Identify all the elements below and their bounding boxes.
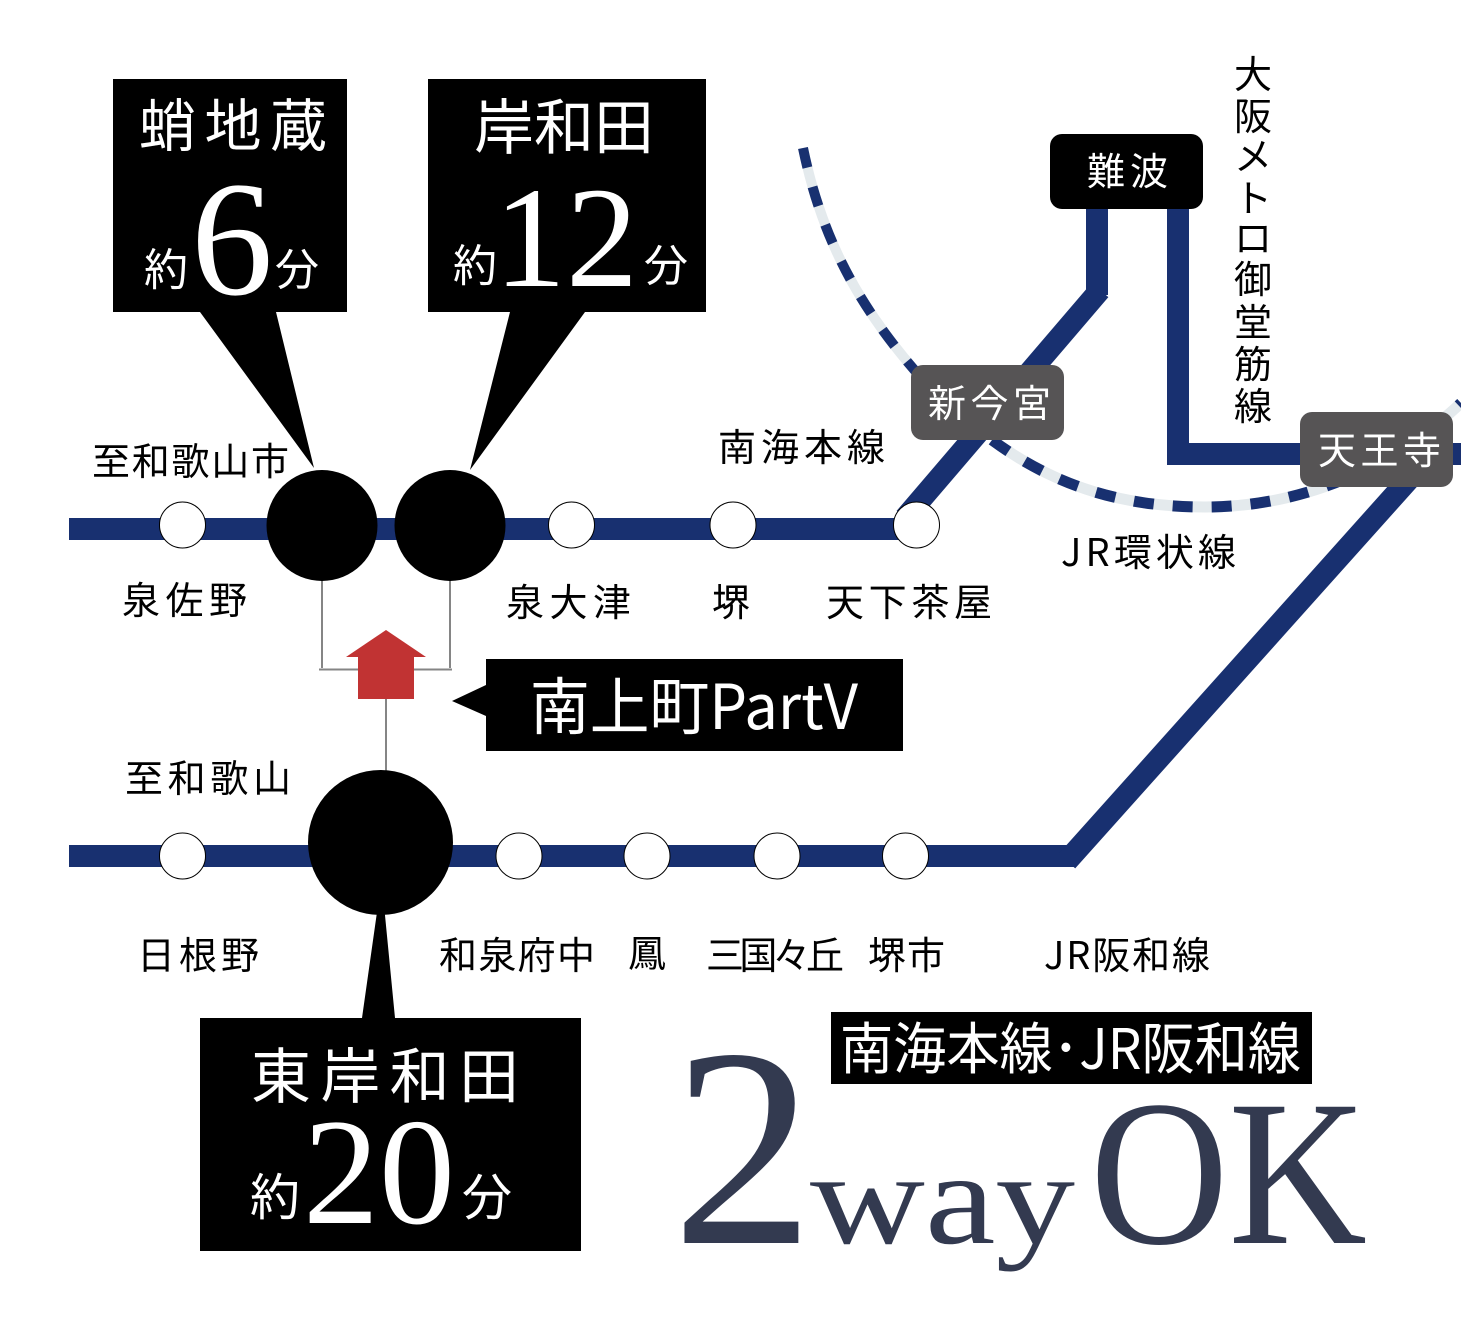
station and line labels: 泉佐野 xyxy=(122,570,247,625)
line label: 大阪メトロ御堂筋線: 筋 xyxy=(1234,334,1272,389)
callout: 岸和田: 12 xyxy=(494,159,638,318)
line label: 大阪メトロ御堂筋線: ト xyxy=(1234,168,1272,223)
station box: 新今宮: 新今宮 xyxy=(928,373,1051,428)
station and line labels: 泉大津 xyxy=(506,572,631,627)
callout: 東岸和田: 分 xyxy=(462,1158,512,1230)
headline: 2way OK: OK xyxy=(1090,1058,1367,1288)
major stations xyxy=(266,470,506,915)
station box: 難波 xyxy=(1050,134,1203,209)
Nankai main line xyxy=(69,200,1100,529)
headline: 2way OK: way xyxy=(810,1125,1075,1272)
station and line labels: 至和歌山 xyxy=(125,748,291,803)
line label: 大阪メトロ御堂筋線: 大 xyxy=(1234,44,1272,99)
callout: 東岸和田: 約 xyxy=(250,1158,300,1230)
callout: 東岸和田: 20 xyxy=(303,1088,455,1256)
callout: 蛸地蔵 xyxy=(113,79,347,468)
callout: 岸和田 xyxy=(428,79,706,470)
line label: 大阪メトロ御堂筋線: 御 xyxy=(1234,249,1272,304)
callout: 岸和田: 分 xyxy=(644,230,688,294)
callout: 蛸地蔵: 6 xyxy=(191,149,273,330)
station and line labels: 堺 xyxy=(712,572,750,627)
station box: 天王寺 xyxy=(1300,412,1453,487)
JR Hanwa line xyxy=(69,478,1410,861)
line label: 大阪メトロ御堂筋線 xyxy=(1234,44,1272,431)
station and line labels: 鳳 xyxy=(628,923,666,978)
station and line labels: 堺市 xyxy=(868,925,945,980)
station and line labels: 和泉府中 xyxy=(439,925,595,980)
callout: 南上町PartV: 南上町PartV xyxy=(530,657,858,747)
callout: 蛸地蔵: 分 xyxy=(275,234,319,298)
callout: 蛸地蔵: 蛸地蔵 xyxy=(139,81,327,163)
station and line labels: 天下茶屋 xyxy=(826,572,992,627)
station and line labels: 南海本線 xyxy=(718,417,885,472)
station box: 天王寺: 天王寺 xyxy=(1318,420,1441,475)
headline: 2way OK xyxy=(672,991,1367,1305)
line label: 大阪メトロ御堂筋線: ロ xyxy=(1234,208,1272,263)
callout: 東岸和田: 東岸和田 xyxy=(251,1029,519,1116)
station box: 難波: 難波 xyxy=(1087,141,1168,196)
connector lines to property xyxy=(319,580,452,772)
callout: 蛸地蔵: 約 xyxy=(144,234,188,298)
JR loop line (upper arc) xyxy=(803,148,925,382)
JR loop line (lower arc) xyxy=(992,403,1461,507)
station and line labels: 三国々丘 xyxy=(706,925,844,980)
icon: red house marker xyxy=(346,630,426,699)
station and line labels xyxy=(92,417,1236,980)
heading badge: 南海本線・JR阪和線: 南海本線･JR阪和線 xyxy=(840,1005,1301,1086)
small stations xyxy=(160,502,940,879)
Midosuji line xyxy=(1178,200,1461,454)
line label: 大阪メトロ御堂筋線: メ xyxy=(1234,126,1272,181)
callout: 東岸和田 xyxy=(200,905,581,1256)
callout: 岸和田: 約 xyxy=(453,230,497,294)
line label: 大阪メトロ御堂筋線: 線 xyxy=(1234,376,1272,431)
line label: 大阪メトロ御堂筋線: 堂 xyxy=(1234,292,1272,347)
station and line labels: 至和歌山市 xyxy=(92,431,289,486)
station and line labels: JR環状線 xyxy=(1061,522,1236,577)
callout: 岸和田: 岸和田 xyxy=(474,80,654,167)
line label: 大阪メトロ御堂筋線: 阪 xyxy=(1234,86,1272,141)
station and line labels: 日根野 xyxy=(137,925,259,980)
headline: 2way OK: 2 xyxy=(672,991,814,1305)
station box: 新今宮 xyxy=(911,365,1064,440)
station and line labels: JR阪和線 xyxy=(1044,925,1210,980)
